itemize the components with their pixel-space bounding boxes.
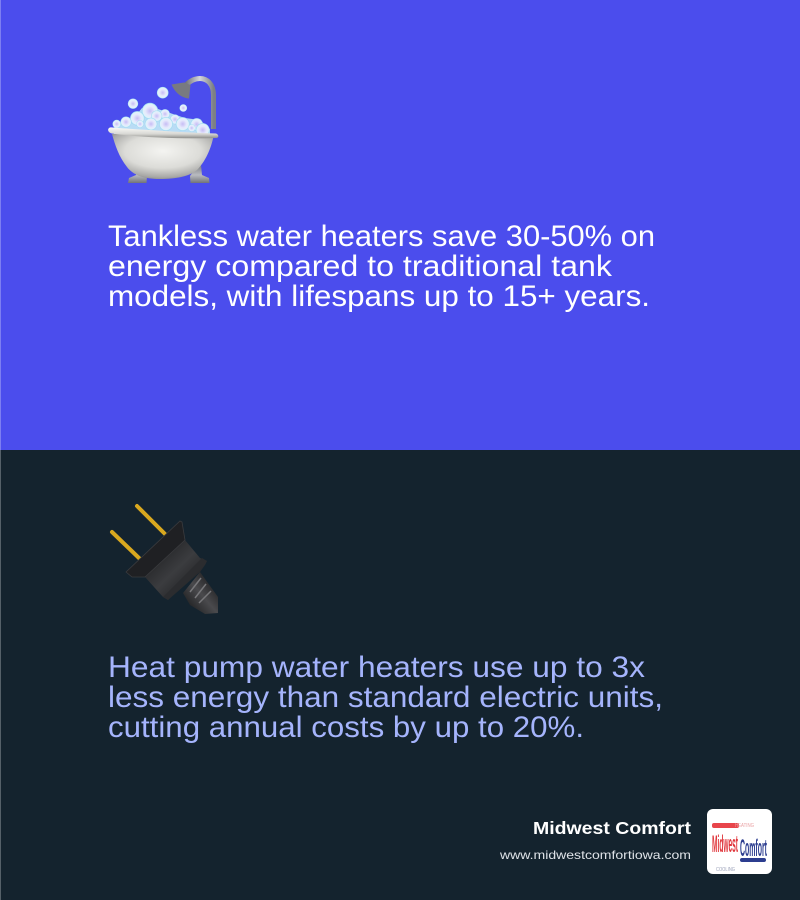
website url: www.midwestcomfortiowa.com <box>499 848 691 862</box>
panel: heat pump water heaters <box>0 450 800 900</box>
icon: electric plug <box>112 506 218 614</box>
logo <box>707 809 772 874</box>
logo: HEATING <box>735 823 754 829</box>
text: tankless savings: Tankless water heaters save 30-50% on <box>108 220 655 253</box>
brand name: Midwest Comfort <box>533 818 691 838</box>
text: heat pump savings: Heat pump water heaters use up to 3x <box>108 651 645 684</box>
icon: bathtub with bubbles <box>108 78 218 183</box>
panel: tankless water heaters <box>0 0 800 450</box>
text: heat pump savings: less energy than standard electric units, <box>108 681 663 714</box>
logo: COOLING <box>716 867 735 873</box>
text: tankless savings: energy compared to traditional tank <box>108 250 612 283</box>
left edge line <box>0 0 1 900</box>
text: tankless savings: models, with lifespans up to 15+ years. <box>108 280 650 313</box>
text: heat pump savings: cutting annual costs by up to 20%. <box>108 711 584 744</box>
